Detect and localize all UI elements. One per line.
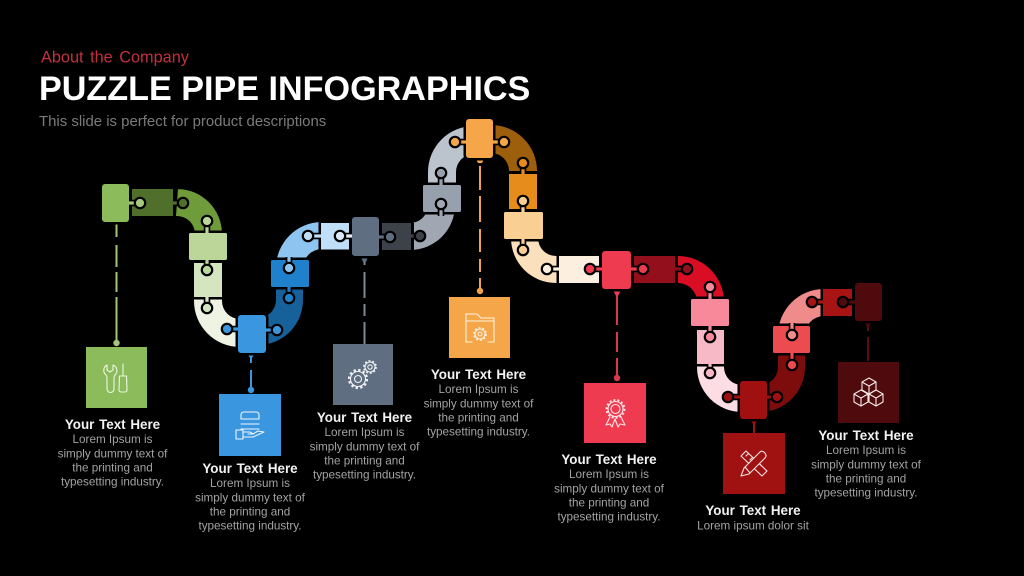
- description: the printing and: [324, 454, 405, 468]
- description: simply dummy text of: [554, 482, 665, 496]
- description: Lorem Ipsum is: [826, 444, 906, 457]
- pipe curve: red: [678, 256, 724, 310]
- pipe head: orange: [466, 119, 493, 163]
- pipe curve: grey lower: [410, 200, 455, 250]
- title: PUZZLE PIPE INFOGRAPHICS: [39, 70, 530, 108]
- pipe: blue section: [238, 222, 349, 358]
- pipe block: light green: [194, 263, 222, 297]
- connector: orange: [477, 166, 483, 294]
- pipe curve: brown: [491, 125, 537, 171]
- header: [39, 48, 530, 130]
- description: simply dummy text of: [195, 492, 306, 504]
- description: the printing and: [210, 506, 290, 518]
- puzzle connector knobs: [129, 137, 855, 402]
- connector: blue: [248, 352, 254, 393]
- pipe curve: dark blue: [258, 285, 303, 345]
- description: typesetting industry.: [557, 510, 661, 524]
- pipe block: cream: [559, 256, 599, 283]
- connector: red: [614, 289, 620, 381]
- step 7: maroon card: [811, 362, 922, 500]
- description: Lorem ipsum dolor sit: [697, 520, 810, 532]
- pipe curve: pale peach: [511, 230, 565, 283]
- pipe block: dark red: [634, 256, 675, 283]
- icon: folder with gear: [466, 314, 494, 342]
- connector: slate: [364, 256, 366, 344]
- pipe curve: dark maroon: [760, 350, 805, 412]
- pipe head: dark red: [740, 381, 767, 424]
- description: the printing and: [438, 412, 519, 424]
- description: typesetting industry.: [61, 476, 164, 488]
- pipe curve: green top right: [176, 189, 222, 240]
- pipe head: slate: [352, 217, 379, 262]
- icon tile: folder: [449, 297, 510, 358]
- pipe head: blue: [238, 315, 266, 358]
- icon tile: medal: [584, 383, 646, 443]
- icon: wrench and screwdriver: [104, 364, 127, 392]
- pipe: orange section: [466, 119, 565, 283]
- heading: Your Text Here: [317, 410, 412, 425]
- pipe curve: pale green bottom left: [194, 296, 245, 347]
- pipe curve: light blue: [276, 222, 325, 268]
- heading: Your Text Here: [65, 417, 160, 432]
- pipe block: pink: [691, 299, 729, 326]
- icon tile: pencil and ruler: [723, 433, 785, 494]
- icon: stacked cubes: [854, 378, 883, 406]
- pipe: slate section: [352, 126, 478, 262]
- icon: award ribbon: [606, 400, 625, 427]
- description: Lorem Ipsum is: [569, 468, 649, 481]
- description: Lorem Ipsum is: [325, 426, 405, 439]
- description: typesetting industry.: [427, 426, 530, 438]
- pipe block: orange: [509, 174, 537, 209]
- step 4: orange card: [424, 297, 534, 438]
- description: the printing and: [826, 472, 906, 486]
- pipe: green section: [102, 184, 245, 347]
- pipe: red section: [559, 251, 750, 412]
- description: simply dummy text of: [811, 458, 922, 472]
- description: simply dummy text of: [58, 448, 168, 460]
- pipe curve: grey upper: [428, 126, 478, 190]
- description: simply dummy text of: [424, 398, 534, 410]
- step 1: green card: [58, 347, 168, 488]
- pipe curve: salmon: [778, 289, 830, 345]
- heading: Your Text Here: [705, 503, 801, 518]
- icon tile: tools: [86, 347, 147, 408]
- description: typesetting industry.: [814, 486, 918, 500]
- pipe head: red: [602, 251, 631, 296]
- pipe block: crimson: [823, 289, 852, 316]
- pipe: maroon section: [740, 283, 882, 424]
- pipe block: mid blue: [271, 260, 309, 287]
- description: the printing and: [72, 462, 153, 474]
- description: typesetting industry.: [198, 520, 302, 532]
- dashed connector lines: [113, 166, 868, 433]
- connector: dark red: [753, 419, 755, 433]
- pipe head: green: [102, 184, 129, 222]
- heading: Your Text Here: [818, 428, 914, 443]
- heading: Your Text Here: [561, 452, 657, 467]
- icon tile: hand: [219, 394, 281, 456]
- pipe block: dark green: [132, 189, 173, 216]
- description: Lorem Ipsum is: [439, 383, 519, 396]
- pipe block: coral: [773, 326, 810, 353]
- description: Lorem Ipsum is: [73, 433, 153, 446]
- pipe head: maroon: [855, 283, 882, 327]
- pipe block: grey: [423, 185, 461, 212]
- description: typesetting industry.: [313, 468, 416, 482]
- icon: gears: [349, 361, 376, 388]
- icon: hand holding stack: [236, 412, 264, 439]
- eyebrow: about the company: About the Company: [41, 48, 190, 66]
- heading: Your Text Here: [202, 461, 298, 476]
- step 2: blue card: [195, 394, 306, 532]
- description: the printing and: [569, 496, 649, 510]
- pipe curve: pale pink: [697, 360, 750, 412]
- subtitle: This slide is perfect for product descriptions: [39, 113, 326, 130]
- pipe block: peach: [504, 212, 543, 239]
- icon tile: cubes: [838, 362, 899, 423]
- icon: pencil and ruler: [741, 451, 767, 476]
- heading: Your Text Here: [431, 367, 526, 382]
- step 3: slate card: [310, 344, 420, 482]
- pipe block: pale blue: [321, 223, 349, 250]
- pipe block: medium light green: [189, 233, 227, 260]
- connector: green: [113, 222, 120, 346]
- step 6: dark red card: [697, 433, 810, 532]
- icon tile: gears: [333, 344, 393, 405]
- pipe block: light pink: [697, 330, 724, 364]
- description: simply dummy text of: [310, 440, 420, 454]
- description: Lorem Ipsum is: [210, 477, 290, 490]
- step 5: red card: [554, 383, 665, 524]
- pipe block: dark grey: [382, 223, 411, 250]
- connector: maroon: [867, 321, 869, 361]
